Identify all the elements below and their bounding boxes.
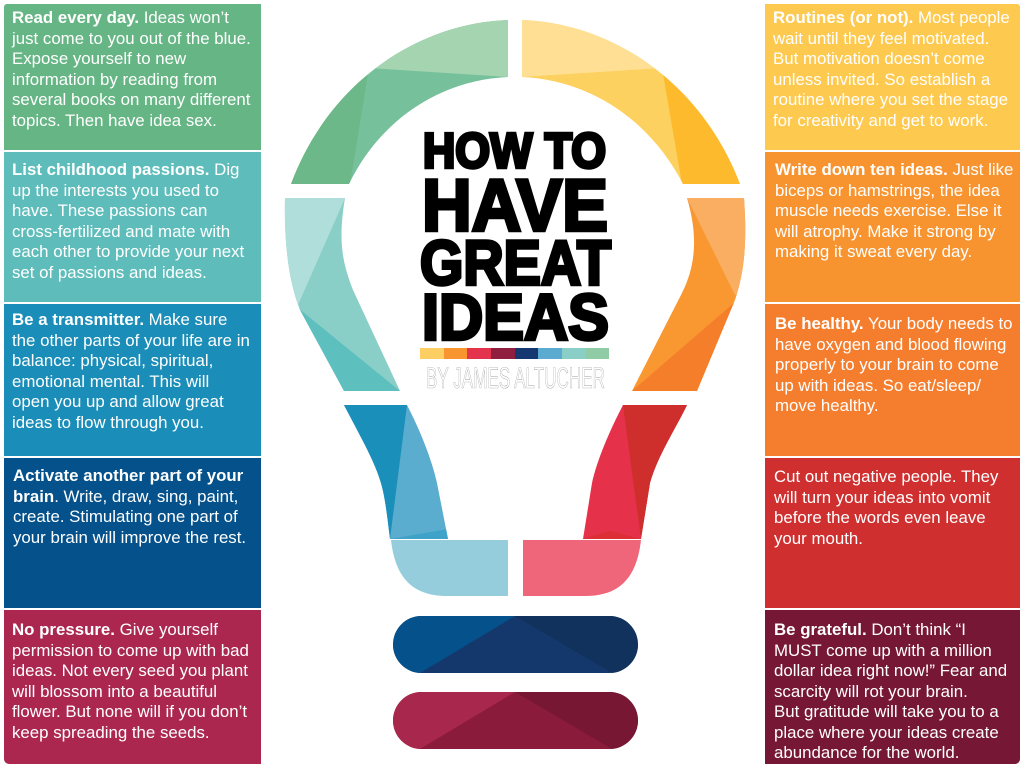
panel: read every day: Read every day. Ideas won’t <box>12 8 229 27</box>
panel: be healthy: up with ideas. So eat/sleep/ <box>775 376 981 394</box>
panel: routines: routine where you set the stage <box>773 90 1008 109</box>
panel: routines: for creativity and get to work. <box>773 110 988 130</box>
panel: write down ten ideas: making it sweat every day. <box>775 242 972 261</box>
panel: read every day: information by reading from <box>12 70 217 88</box>
bulb base: pink <box>523 540 641 596</box>
panel: no pressure: will blossom into a beautiful <box>12 682 217 700</box>
panel: no pressure: permission to come up with bad <box>12 640 249 660</box>
panel: be healthy: properly to your brain to come <box>775 355 999 374</box>
panel: routines: unless invited. So establish a <box>773 70 990 88</box>
panel: list childhood passions: set of passions and ideas. <box>12 262 207 282</box>
panel: write down ten ideas: will atrophy. Make it strong by <box>775 222 996 240</box>
byline: BY JAMES ALTUCHER <box>426 362 605 395</box>
panel: be grateful: abundance for the world. <box>774 743 959 762</box>
panel: cut out negative people: will turn your ideas into vomit <box>774 488 990 506</box>
bulb segment: red <box>583 405 687 539</box>
panel: list childhood passions: cross-fertilized and mate with <box>12 222 230 240</box>
panel: routines: Routines (or not). Most people <box>773 8 1010 27</box>
panel: cut out negative people: before the words even leave <box>774 508 986 527</box>
panel: be healthy: have oxygen and blood flowing <box>775 334 1006 354</box>
panel: routines: wait until they feel motivated. <box>773 28 989 48</box>
panel: list childhood passions: each other to provide your next <box>12 242 244 261</box>
panel: activate another part of your brain <box>4 458 261 608</box>
title colour bar <box>420 348 609 359</box>
panel: write down ten ideas: Write down ten ideas. Just like <box>775 160 1013 179</box>
bulb segment: yellow <box>522 20 740 184</box>
bulb segment: blue <box>344 405 448 539</box>
panel: be a transmitter: ideas to flow through you. <box>12 412 204 432</box>
bulb screw: crimson bar <box>393 692 638 749</box>
panel: be grateful: place where your ideas create <box>774 722 999 742</box>
bulb base: light blue <box>391 540 508 596</box>
panel: cut out negative people: Cut out negative people. They <box>774 467 998 486</box>
panel: be grateful: dollar idea right now!” Fear and <box>774 661 1007 680</box>
panel: activate another part of your brain: create. Stimulating one part of <box>13 507 238 526</box>
panel: no pressure: keep spreading the seeds. <box>12 722 210 742</box>
panel: be healthy: move healthy. <box>775 396 879 415</box>
panel: be a transmitter: Be a transmitter. Make sure <box>12 310 227 329</box>
panel: be a transmitter: the other parts of your life are in <box>12 330 250 350</box>
panel: cut out negative people <box>765 458 1020 608</box>
panel: list childhood passions: up the interests you used to <box>12 180 219 200</box>
panel: activate another part of your brain: your brain will improve the rest. <box>13 528 246 546</box>
panel: be grateful <box>765 610 1020 764</box>
title: HAVE <box>422 164 608 246</box>
panel: no pressure: No pressure. Give yourself <box>12 620 218 639</box>
title: HOW TO <box>423 124 606 178</box>
panel: list childhood passions: have. These passions can <box>12 201 207 220</box>
bulb segment: teal <box>284 198 400 391</box>
title: IDEAS <box>422 280 609 353</box>
panel: be grateful: Be grateful. Don’t think “I <box>774 620 966 639</box>
panel: no pressure: flower. But none will if you don’t <box>12 702 247 721</box>
bulb screw: navy bar <box>393 616 638 673</box>
panel: be grateful: But gratitude will take you to a <box>774 702 999 721</box>
panel: be healthy: Be healthy. Your body needs to <box>775 314 1013 333</box>
panel: read every day: Expose yourself to new <box>12 49 186 68</box>
panel: be a transmitter: emotional mental. This will <box>12 372 209 390</box>
panel: read every day: several books on many different <box>12 90 250 109</box>
panel: write down ten ideas <box>765 152 1020 302</box>
bulb segment: green <box>291 20 508 184</box>
panel: write down ten ideas: biceps or hamstrings, the idea <box>775 180 1000 200</box>
title <box>420 124 611 353</box>
panel: activate another part of your brain: brain. Write, draw, sing, paint, <box>13 486 238 506</box>
panel: be healthy <box>765 304 1020 456</box>
panel: routines: But motivation doesn’t come <box>773 49 985 68</box>
panel: cut out negative people: your mouth. <box>774 528 863 548</box>
panel: be a transmitter: open you up and allow great <box>12 392 224 411</box>
panel: list childhood passions: List childhood passions. Dig <box>12 160 239 179</box>
panel: be grateful: MUST come up with a million <box>774 640 992 660</box>
panel: be a transmitter <box>4 304 261 456</box>
panel: read every day <box>4 4 261 150</box>
panel: be a transmitter: balance: physical, spiritual, <box>12 351 213 370</box>
light bulb illustration with title <box>284 20 746 749</box>
panel: read every day: just come to you out of the blue. <box>12 28 251 48</box>
panel: no pressure <box>4 610 261 764</box>
panel: write down ten ideas: muscle needs exercise. Else it <box>775 201 1002 220</box>
panel: be grateful: scarcity will rot your brain. <box>774 682 968 700</box>
panel: no pressure: ideas. Not every seed you plant <box>12 661 248 680</box>
panel: activate another part of your brain: Activate another part of your <box>13 466 243 485</box>
bulb segment: orange <box>632 198 746 391</box>
title: GREAT <box>420 228 611 298</box>
panel: list childhood passions <box>4 152 261 302</box>
panel: read every day: topics. Then have idea sex. <box>12 110 217 130</box>
panel: routines <box>765 4 1020 150</box>
